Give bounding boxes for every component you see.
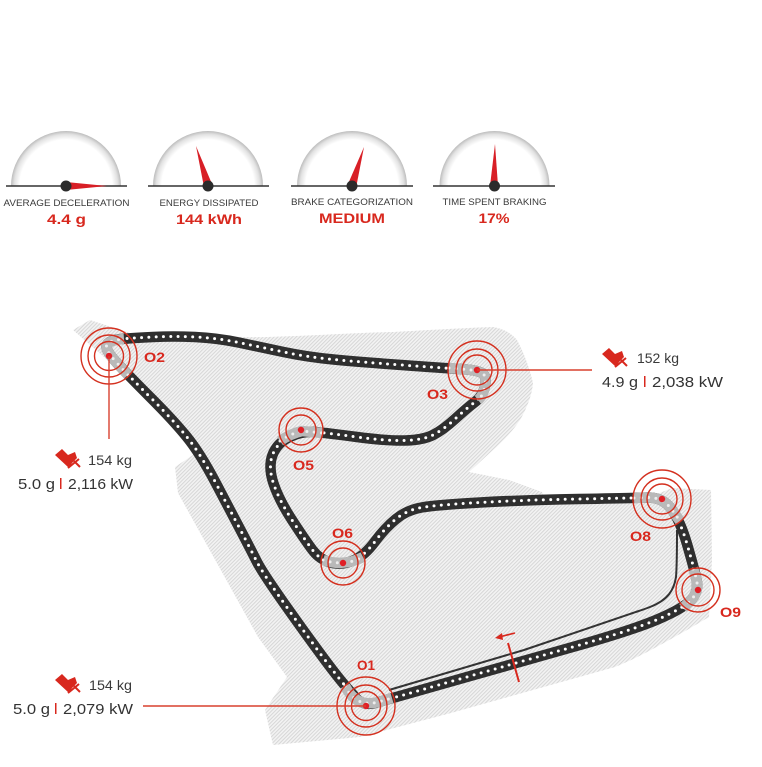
circuit terrain hatch: [73, 320, 712, 745]
gauge: average deceleration: AVERAGE DECELERATION: [4, 198, 130, 209]
corner 06: [321, 525, 365, 585]
corner 08: O8: [630, 528, 651, 544]
callout: corner 01 data: 5.0 g: [13, 701, 50, 718]
corner 06: O6: [332, 525, 353, 541]
gauge: average deceleration: [4, 131, 130, 227]
callout: corner 02 data: 2,116 kW: [68, 476, 134, 493]
callout: corner 01 data: 2,079 kW: [63, 701, 134, 718]
corner 05: O5: [293, 457, 314, 473]
gauge: energy dissipated: 144 kWh: [176, 211, 242, 227]
gauge: brake categorization: BRAKE CATEGORIZATION: [291, 197, 413, 208]
gauge: time spent braking: TIME SPENT BRAKING: [442, 197, 546, 208]
callout: corner 01 data: 154 kg: [89, 677, 132, 693]
callout: corner 02 data: [18, 449, 134, 493]
callout leader: corner 03: [477, 369, 592, 371]
gauge: time spent braking: 17%: [478, 210, 510, 226]
corner 09: [676, 568, 741, 620]
callout: corner 03 data: [602, 348, 724, 391]
corner 01: O1: [357, 657, 375, 673]
callout leader: corner 01: [143, 705, 366, 707]
corner 05: [279, 408, 323, 473]
corner 08: [630, 470, 691, 544]
race track: [106, 336, 697, 704]
callout leader: corner 02: [108, 356, 110, 439]
callout: corner 01 data: [13, 674, 134, 718]
gauge: average deceleration: 4.4 g: [47, 211, 86, 227]
callout: corner 02 data: 154 kg: [88, 452, 132, 468]
corner 02: [81, 328, 165, 384]
corner 02: O2: [144, 349, 165, 365]
inner thin track line: [389, 530, 677, 690]
callout: corner 03 data: 4.9 g: [602, 374, 638, 391]
corner 03: [427, 341, 506, 402]
gauge: brake categorization: [291, 131, 413, 226]
callout: corner 03 data: 152 kg: [637, 350, 679, 366]
callout: corner 02 data: 5.0 g: [18, 476, 55, 493]
corner 01: [337, 657, 395, 735]
start line marker: [508, 643, 519, 682]
direction arrow: [495, 633, 515, 640]
corner 03: O3: [427, 386, 448, 402]
gauge: time spent braking: [433, 131, 555, 226]
corner 09: O9: [720, 604, 741, 620]
gauge: brake categorization: MEDIUM: [319, 210, 385, 226]
gauge: energy dissipated: [148, 131, 269, 227]
callout: corner 03 data: 2,038 kW: [652, 374, 724, 391]
gauge: energy dissipated: ENERGY DISSIPATED: [160, 198, 259, 209]
